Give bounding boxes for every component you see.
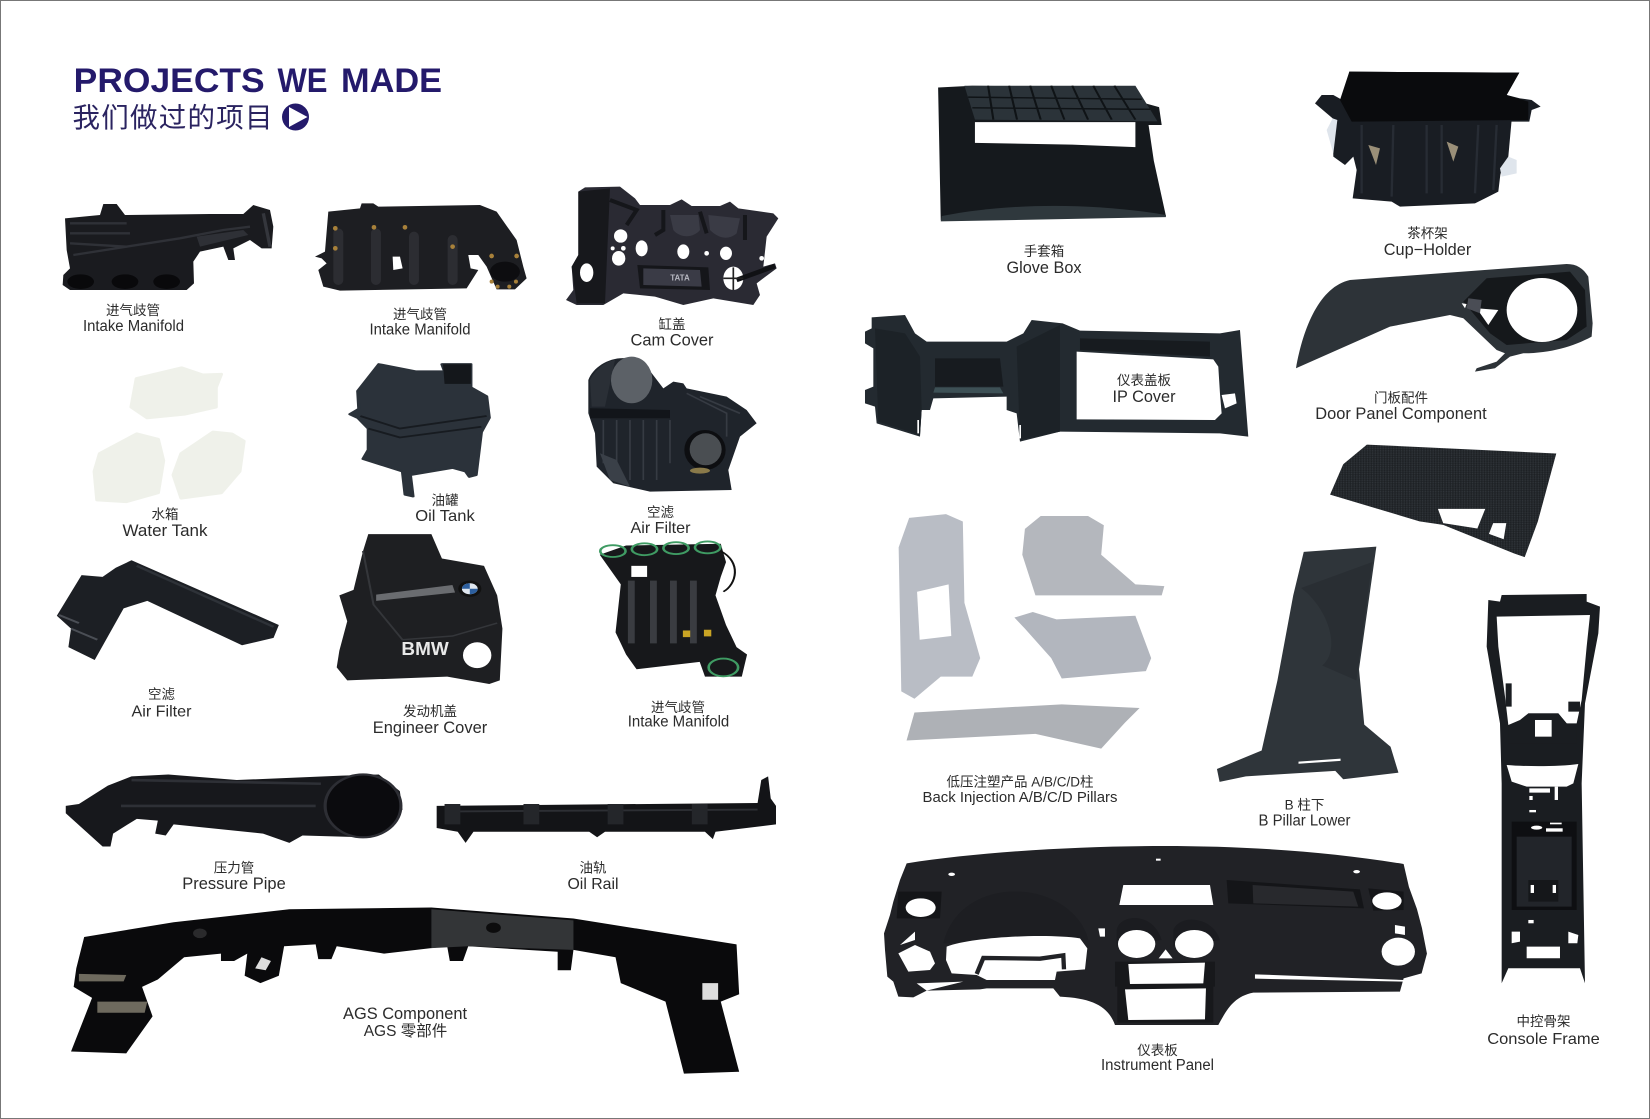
label: AGS component: AGS 零部件 <box>364 1022 447 1040</box>
label: pressure pipe <box>182 860 286 893</box>
label: back injection pillars <box>922 774 1118 806</box>
title: Projects We Made <box>72 62 442 133</box>
label: glove box: 手套箱 <box>1024 244 1064 259</box>
label: cam cover <box>630 316 714 350</box>
label: B pillar lower: B 柱下 <box>1285 798 1324 812</box>
label: oil rail: 油轨 <box>580 860 607 876</box>
part: oil rail <box>437 776 776 843</box>
label: air filter 2: 空滤 <box>148 687 175 702</box>
label: engine cover: Engineer Cover <box>373 719 488 737</box>
label: console frame <box>1487 1014 1600 1048</box>
label: instrument panel: 仪表板 <box>1137 1043 1178 1058</box>
label: oil tank <box>415 493 476 525</box>
label: oil rail <box>568 860 618 893</box>
label: instrument panel <box>1101 1043 1214 1074</box>
label: B pillar lower <box>1258 798 1350 830</box>
label: door panel component: 门板配件 <box>1374 390 1428 406</box>
part: instrument panel <box>884 846 1427 1025</box>
part: intake manifold 2 <box>315 203 527 291</box>
part: AGS component <box>71 907 739 1074</box>
label: oil rail: Oil Rail <box>568 876 618 893</box>
label: intake manifold 2 <box>370 307 470 338</box>
label: intake manifold 2: Intake Manifold <box>370 322 470 338</box>
label: oil tank: 油罐 <box>432 493 459 508</box>
label: oil tank: Oil Tank <box>415 508 476 525</box>
label: cup holder <box>1384 226 1472 259</box>
part: cam cover <box>566 187 778 305</box>
label: door panel component: Door Panel Component <box>1315 404 1487 423</box>
label: air filter 1 <box>630 505 691 537</box>
label: water tank <box>122 507 208 540</box>
label: intake manifold 3: Intake Manifold <box>628 714 729 730</box>
label: glove box <box>1006 244 1082 277</box>
label: intake manifold 1 <box>83 303 184 335</box>
title: Projects We Made: MADE <box>341 62 442 100</box>
part: water tank <box>95 368 244 502</box>
label: water tank: 水箱 <box>152 507 178 522</box>
label: cam cover: Cam Cover <box>630 332 714 350</box>
label: intake manifold 3 <box>628 700 729 730</box>
label: air filter 2 <box>132 687 192 720</box>
label: water tank: Water Tank <box>122 522 208 540</box>
label: pressure pipe: 压力管 <box>214 860 254 876</box>
label: intake manifold 3: 进气歧管 <box>651 700 705 715</box>
label: air filter 1: 空滤 <box>647 505 674 520</box>
label: intake manifold 1: 进气歧管 <box>106 303 160 318</box>
part: engine cover: BMW <box>401 638 449 659</box>
label: air filter 1: Air Filter <box>630 520 691 537</box>
part: back injection pillars <box>899 514 1164 749</box>
label: cam cover: 缸盖 <box>658 316 686 332</box>
part: B pillar lower <box>1217 547 1398 782</box>
label: glove box: Glove Box <box>1006 259 1082 277</box>
label: instrument panel: Instrument Panel <box>1101 1057 1214 1074</box>
label: air filter 2: Air Filter <box>132 704 192 720</box>
part: door panel component <box>1296 264 1593 372</box>
part: IP cover <box>865 315 1248 442</box>
label: IP cover: IP Cover <box>1112 388 1176 406</box>
label: back injection pillars: Back Injection A/B/C/D Pillars <box>922 789 1118 806</box>
part: pressure pipe <box>66 775 402 847</box>
part: air filter box <box>588 357 757 492</box>
title: Projects We Made: WE <box>278 62 328 100</box>
part: cup holder <box>1315 72 1541 207</box>
label: IP cover <box>1112 373 1176 406</box>
label: engine cover: 发动机盖 <box>403 704 457 719</box>
label: cup holder: 茶杯架 <box>1407 226 1448 241</box>
label: back injection pillars: 低压注塑产品 A/B/C/D柱 <box>946 774 1094 790</box>
label: door panel component <box>1315 390 1487 423</box>
part: intake manifold 1 <box>63 204 273 290</box>
label: engine cover <box>373 704 488 737</box>
label: AGS component <box>343 1005 467 1040</box>
part: cam cover: TATA <box>670 274 690 283</box>
title: Projects We Made: PROJECTS <box>74 62 265 100</box>
part: console frame <box>1487 594 1600 983</box>
part: oil tank <box>350 364 489 496</box>
label: B pillar lower: B Pillar Lower <box>1258 812 1350 830</box>
part: air filter duct <box>57 560 279 660</box>
label: AGS component: AGS Component <box>343 1005 467 1023</box>
label: intake manifold 1: Intake Manifold <box>83 318 184 335</box>
label: console frame: Console Frame <box>1487 1031 1600 1048</box>
part: grained trim <box>1330 445 1556 557</box>
label: IP cover: 仪表盖板 <box>1117 373 1171 388</box>
label: cup holder: Cup−Holder <box>1384 241 1472 259</box>
label: intake manifold 2: 进气歧管 <box>393 307 447 322</box>
part: intake manifold 3 <box>600 541 747 677</box>
label: console frame: 中控骨架 <box>1516 1014 1570 1029</box>
title: Projects We Made: 我们做过的项目 <box>72 102 272 133</box>
label: pressure pipe: Pressure Pipe <box>182 875 286 893</box>
part: glove box <box>938 86 1166 221</box>
part: engine cover <box>337 534 502 684</box>
